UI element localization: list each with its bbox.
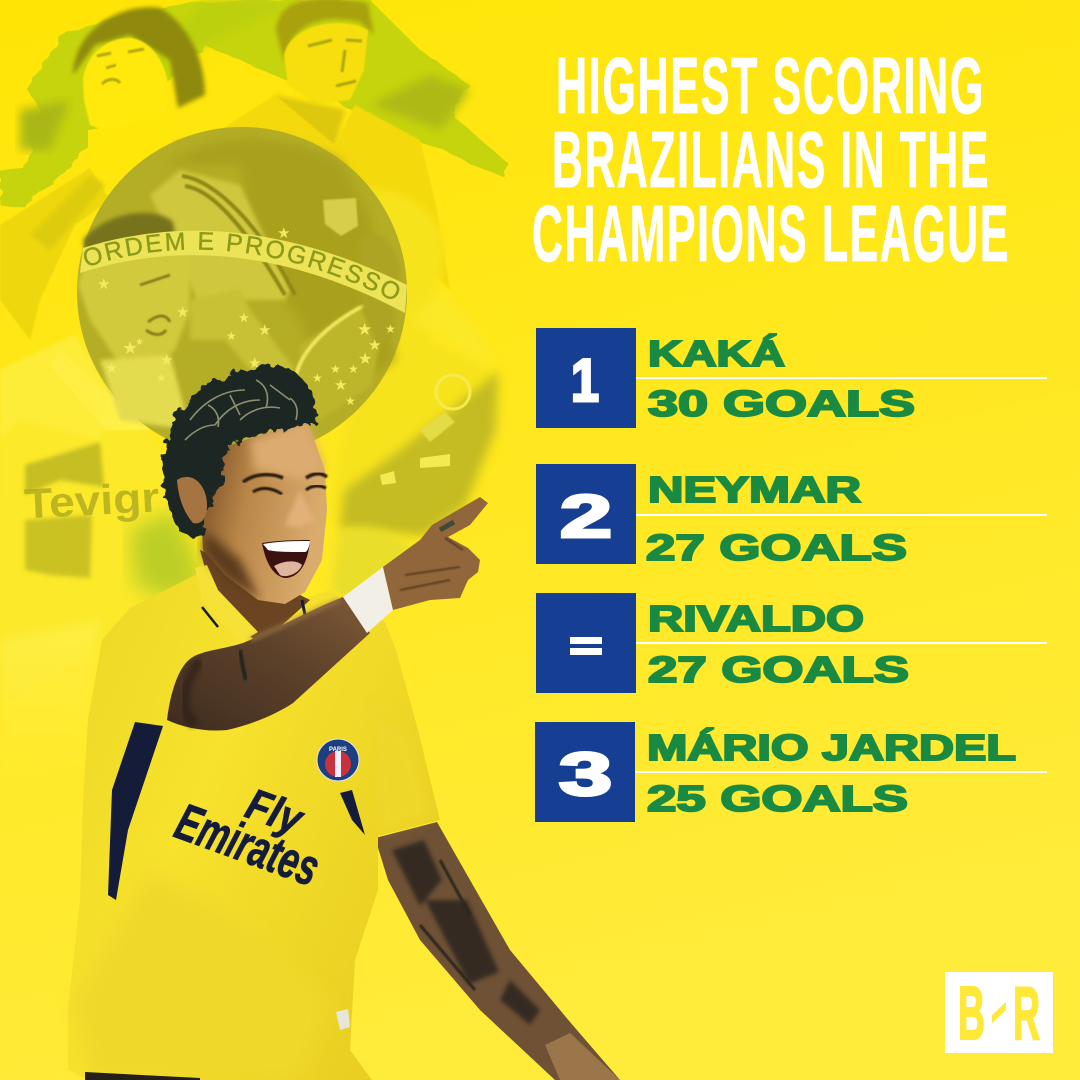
flag circle [76,127,407,446]
flag stars: ★ [226,329,237,343]
flag stars: ★ [156,371,167,385]
eyes and brows [243,474,327,482]
shirt lower right in circle [296,305,380,420]
flag stars: ★ [277,225,290,242]
flag stars: ★ [135,337,144,348]
flag stars: ★ [248,355,261,372]
logo: B/R: R [1013,971,1040,1055]
flag stars: ★ [312,371,323,385]
flag stars: ★ [160,352,173,369]
rank 3: Mario Jardel: 25 GOALS [647,778,908,819]
flag stars: ★ [385,322,396,336]
title [532,41,1010,278]
hand [383,497,488,610]
green brush strokes [0,0,510,208]
rank 1: Kaka: 30 GOALS [648,383,915,424]
flag stars: ★ [348,362,359,376]
lower arm [375,822,620,1080]
rank 1: Kaka: KAKÁ [648,333,785,374]
rank 2: Neymar: 27 GOALS [646,527,907,568]
hair [162,365,316,540]
sleeve stripe [108,722,163,900]
jersey shading [75,870,330,1080]
rank 1: Kaka [536,328,1047,428]
Neymar [68,365,620,1080]
face right in circle [360,234,400,345]
flag stars: ★ [334,377,347,394]
sponsor: Emirates [168,793,327,898]
flag stars: ★ [368,337,381,354]
ear [177,477,207,523]
flag stars [97,225,396,408]
faded player: Kaka [0,7,205,340]
rank 2: Neymar: NEYMAR [648,469,861,510]
face in circle [78,238,190,370]
flag stars: ★ [345,394,356,408]
rank 3: Mario Jardel: 3 [559,741,612,808]
left faded player shirt: Tevigr [23,473,160,527]
arm [167,597,370,731]
flag stars: ★ [238,310,250,325]
crest [317,739,359,781]
left faded player shirt [0,335,205,700]
hand in circle [190,288,295,375]
flag stars: ★ [357,320,372,339]
sponsor: Fly [240,779,311,845]
rank 2: Neymar: 2 [560,483,612,550]
crest: PARIS [329,747,347,753]
Barcelona shirt in circle [150,139,395,400]
flag stars: ★ [122,338,138,358]
flag stars: ★ [358,351,372,368]
rank 2 tie: Rivaldo: 27 GOALS [648,649,909,690]
sponsor [168,779,327,898]
rank 3: Mario Jardel: MÁRIO JARDEL [647,727,1016,768]
right faded player [330,189,500,610]
faded player: Rivaldo [170,0,450,290]
flag stars: ★ [330,362,341,376]
logo: B/R: B [958,971,985,1055]
rank 2 tie: Rivaldo [536,593,1047,693]
neck and collar [200,550,310,645]
rank 1: Kaka: 1 [571,347,599,414]
jersey [68,570,440,1080]
rank 3: Mario Jardel [535,722,1047,822]
pale shoulder overlays [0,290,495,790]
logo: B/R [945,971,1053,1055]
nose [285,490,315,528]
Kaka face [83,38,168,133]
flag banner [80,231,407,313]
Kaka hair [73,7,205,108]
rank 2 tie: Rivaldo: RIVALDO [648,598,864,639]
flag stars: ★ [258,322,271,339]
mouth [262,540,310,578]
face [200,420,327,604]
wristband [343,567,393,633]
flag stars: ★ [105,360,118,377]
banner text: ORDEM E PROGRESSO [84,232,400,300]
flag stars: ★ [97,276,110,293]
rank 2: Neymar [536,464,1047,568]
flag stars: ★ [176,304,189,321]
